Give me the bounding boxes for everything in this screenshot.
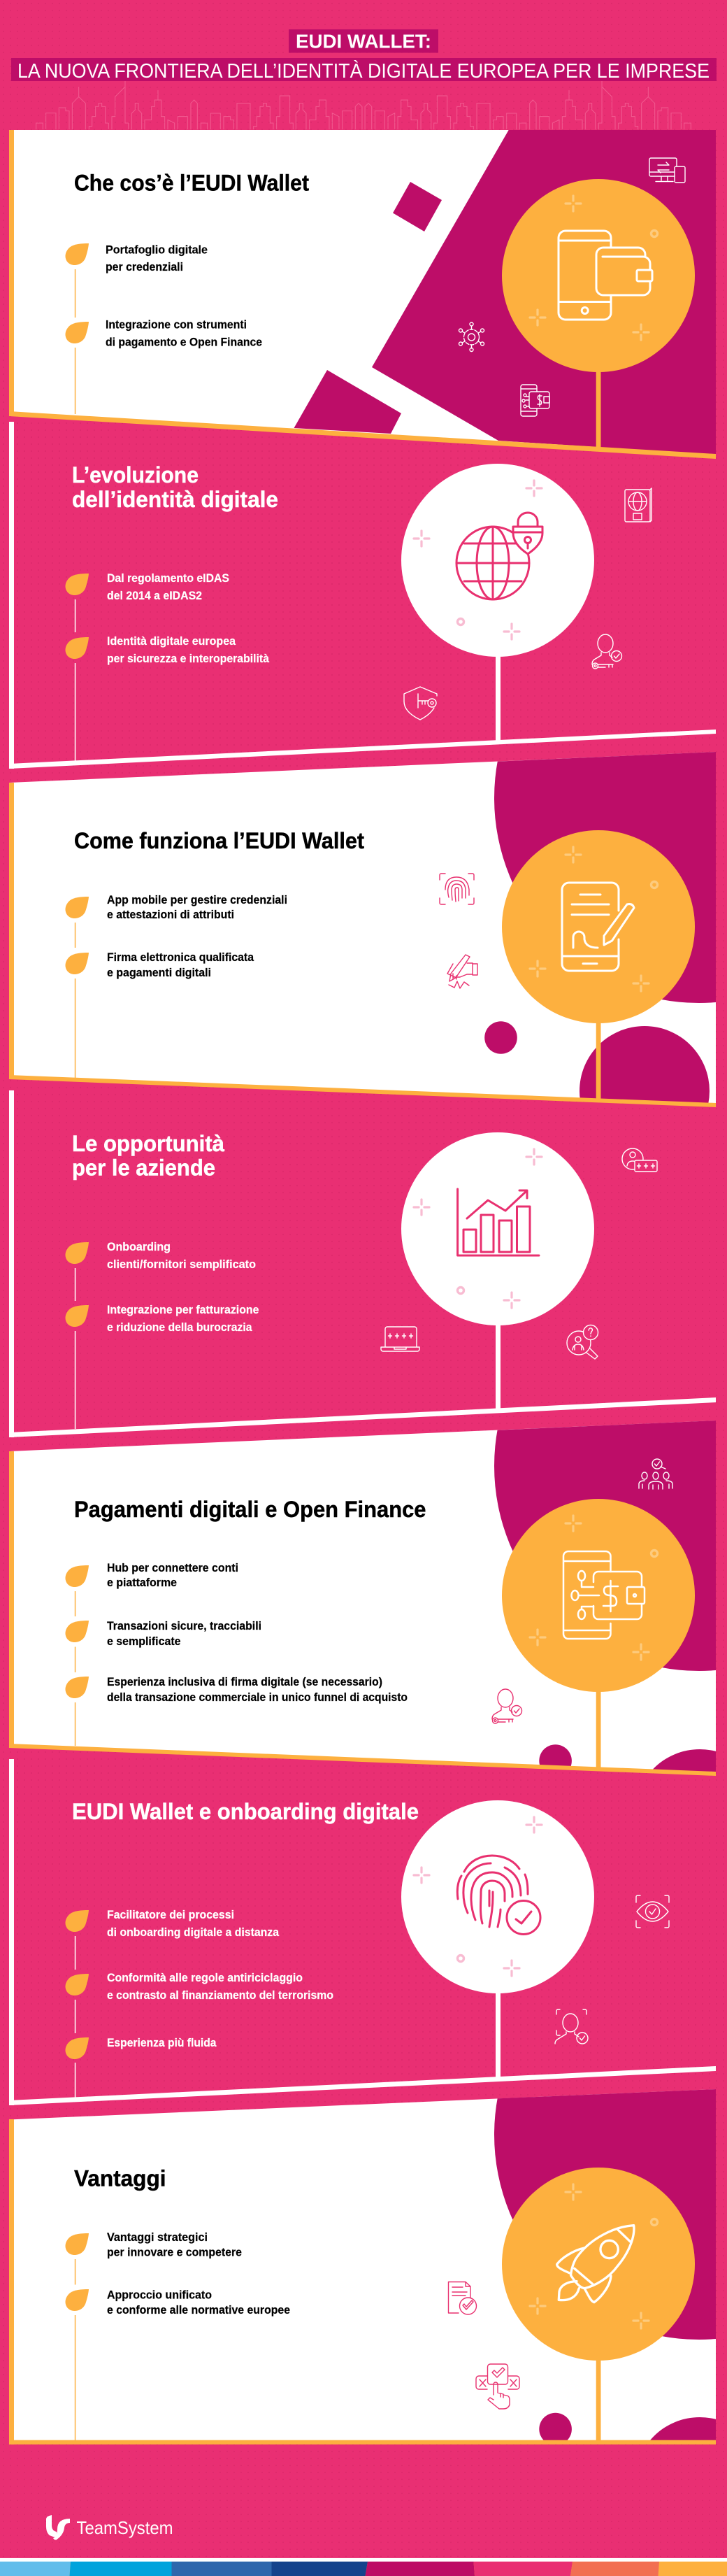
heading: per le aziende: [72, 1155, 215, 1181]
heading: Pagamenti digitali e Open Finance: [74, 1497, 426, 1522]
bullet 3: della transazione commerciale in unico funnel di acquisto: [107, 1691, 408, 1704]
panel: Vantaggi: [9, 2089, 716, 2445]
icon: face scan check: [555, 2009, 588, 2044]
heading: Che cos’è l’EUDI Wallet: [74, 171, 309, 196]
panel: EUDI Wallet e onboarding digitale: [9, 1759, 716, 2105]
heading: L’evoluzione: [72, 462, 199, 488]
bullet 2: Conformità alle regole antiriciclaggio: [107, 1972, 303, 1984]
panel: Che cos'è l'EUDI Wallet: [9, 130, 716, 459]
circle with icon: phone signature: [502, 830, 695, 1023]
bullet 2: per sicurezza e interoperabilità: [107, 653, 270, 665]
circle with icon: rocket: [502, 2168, 695, 2361]
title: [11, 29, 717, 83]
bullet 3: Esperienza inclusiva di firma digitale (se necessario): [107, 1676, 382, 1688]
heading: Come funziona l’EUDI Wallet: [74, 828, 364, 853]
bullet 2: [66, 319, 262, 414]
heading: Vantaggi: [74, 2165, 166, 2191]
icon: monitor and phone: [649, 158, 685, 183]
icon: document check: [449, 2282, 477, 2314]
icon: passport: [625, 488, 652, 522]
icon: eye scan: [636, 1895, 669, 1928]
bullet 1: Onboarding: [107, 1241, 171, 1253]
bullet 1: [66, 572, 229, 632]
logo text: TeamSystem: [77, 2517, 173, 2538]
bullet 2: e contrasto al finanziamento del terrorismo: [107, 1989, 333, 2002]
bullet 2: [66, 1972, 333, 2033]
bullet 2: Approccio unificato: [107, 2289, 212, 2301]
bullet 2: Firma elettronica qualificata: [107, 951, 254, 964]
bullet 3: [66, 1676, 408, 1746]
circle with icon: phone wallet payment: [502, 1499, 695, 1692]
heading: [72, 462, 278, 512]
icon: team search: [639, 1459, 672, 1489]
bullet 1: App mobile per gestire credenziali: [107, 894, 287, 906]
bullet 1: per credenziali: [106, 261, 183, 273]
bullet 1: clienti/fornitori semplificato: [107, 1258, 256, 1271]
bullet 1: Portafoglio digitale: [106, 243, 208, 256]
icon: gear network: [459, 322, 484, 351]
heading: [72, 1131, 224, 1181]
bullet 2: Transazioni sicure, tracciabili: [107, 1620, 261, 1632]
panel: Come funziona l'EUDI Wallet: [9, 752, 716, 1107]
bullet 1: [66, 1241, 256, 1301]
icon: shield and key: [404, 687, 437, 720]
footer: [0, 2515, 727, 2576]
bullet 2: Integrazione con strumenti: [106, 319, 247, 332]
bullet 1: [66, 894, 287, 948]
heading: dell’identità digitale: [72, 487, 278, 512]
bullet 1: del 2014 a eIDAS2: [107, 590, 202, 602]
logo: TeamSystem mark: [46, 2515, 70, 2540]
icon: user and key pink: [492, 1689, 521, 1723]
bullet 1: [66, 2231, 242, 2284]
colour bar: [0, 2561, 727, 2576]
bullet 2: [66, 635, 270, 761]
bullet 2: [66, 1620, 261, 1672]
circle with icon: phone and wallet: [502, 179, 695, 372]
icon: hand signing: [447, 955, 477, 988]
bullet 2: e pagamenti digitali: [107, 967, 211, 979]
bullet 1: e piattaforme: [107, 1577, 177, 1589]
bullet 2: e semplificate: [107, 1635, 180, 1648]
bullet 1: [66, 1562, 238, 1616]
skyline: [36, 81, 691, 129]
heading: Le opportunità: [72, 1131, 224, 1156]
icon: phone wallet network: [521, 385, 549, 416]
icon: user and key: [592, 634, 622, 669]
heading: EUDI Wallet e onboarding digitale: [72, 1799, 419, 1824]
panel: L'evoluzione dell'identità digitale: [9, 422, 716, 769]
icon: laptop password: [381, 1327, 419, 1351]
icon: choice selection hand: [476, 2364, 519, 2409]
icon: user search question: [567, 1325, 598, 1359]
panel: Le opportunità per le aziende: [9, 1090, 716, 1437]
bullet 1: Vantaggi strategici: [107, 2231, 208, 2244]
bullet 2: e conforme alle normative europee: [107, 2304, 290, 2317]
bullet 2: e riduzione della burocrazia: [107, 1321, 252, 1334]
icon: fingerprint scan: [440, 874, 474, 904]
circle with icon: growth chart: [401, 1132, 594, 1325]
stripe: [0, 2558, 727, 2561]
bullet 2: Identità digitale europea: [107, 635, 236, 648]
bullet 2: Integrazione per fatturazione: [107, 1304, 259, 1316]
bullet 3: [66, 2037, 217, 2098]
bullet 1: [66, 243, 208, 318]
panel: Pagamenti digitali e Open Finance: [9, 1421, 716, 1776]
bullet 1: Hub per connettere conti: [107, 1562, 238, 1574]
bullet 1: e attestazioni di attributi: [107, 909, 234, 921]
bullet 1: di onboarding digitale a distanza: [107, 1926, 280, 1939]
circle with icon: fingerprint check: [401, 1800, 594, 1993]
bullet 1: Facilitatore dei processi: [107, 1909, 234, 1921]
title: EUDI WALLET:: [296, 31, 431, 52]
bullet 1: Dal regolamento eIDAS: [107, 572, 229, 585]
bullet 1: [66, 1909, 280, 1970]
bullet 2: [66, 951, 254, 1078]
bullet 1: per innovare e competere: [107, 2247, 242, 2259]
bullet 2: di pagamento e Open Finance: [106, 336, 262, 348]
bullet 2: [66, 2289, 290, 2440]
bullet 3: Esperienza più fluida: [107, 2037, 217, 2049]
bullet 2: [66, 1304, 259, 1429]
circle with icon: globe and lock: [401, 464, 594, 657]
icon: user password: [622, 1148, 657, 1172]
